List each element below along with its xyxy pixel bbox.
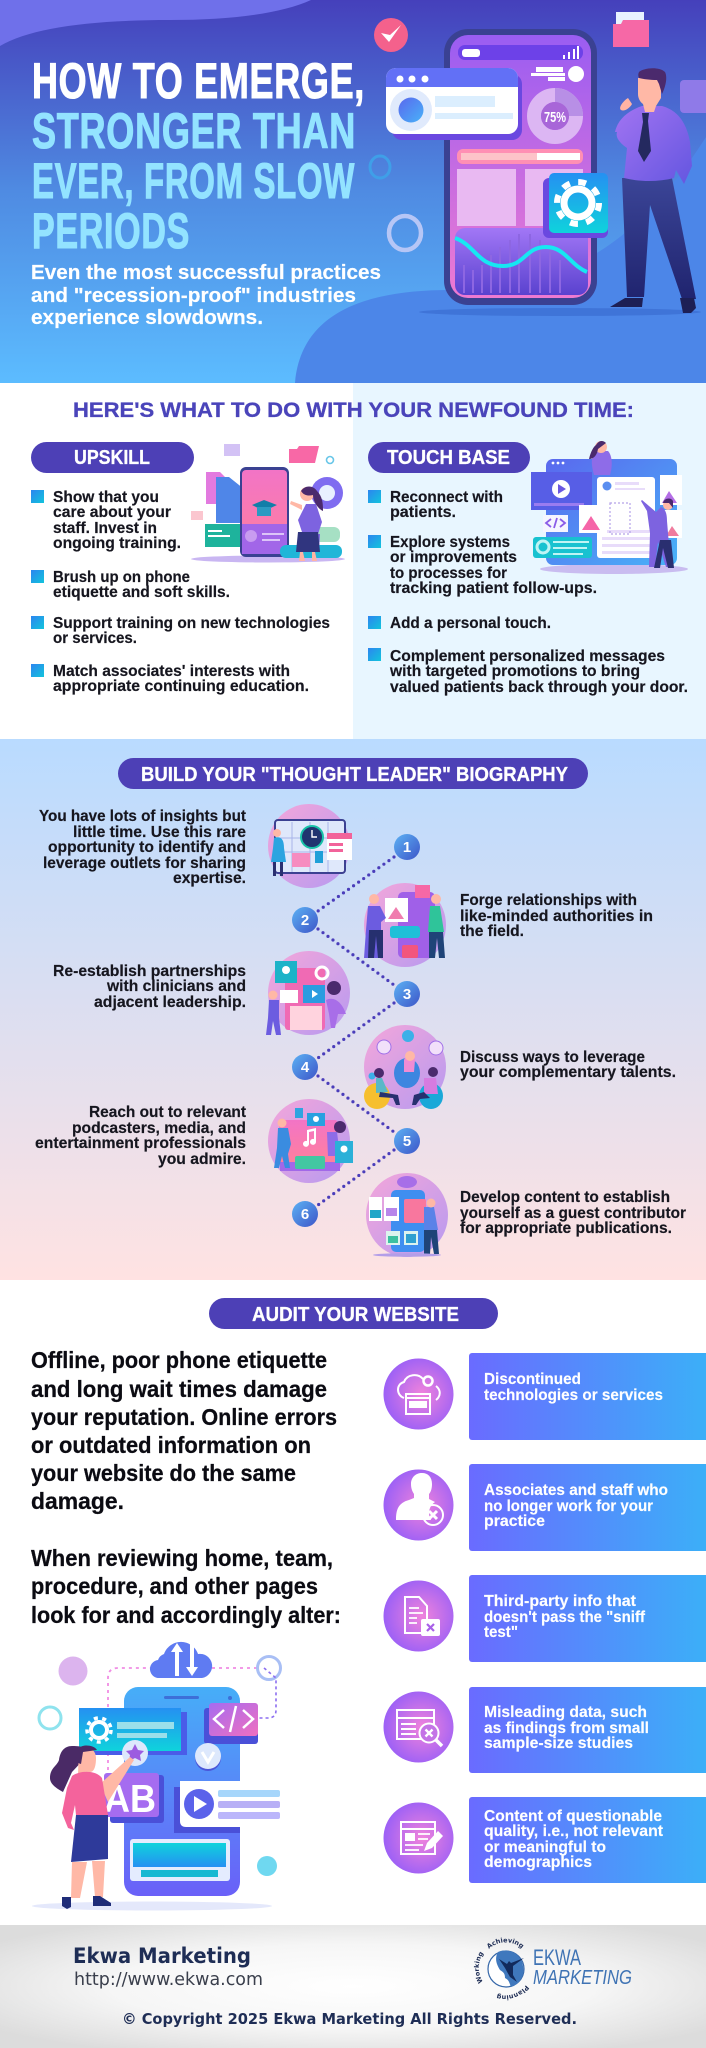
text: audit intro — [31, 1347, 341, 1628]
text: step 4: Discuss ways to leverage — [460, 1049, 645, 1066]
panel: footer — [0, 1925, 706, 2048]
icon: cloud window — [384, 1358, 454, 1430]
text: step 5: you admire. — [158, 1151, 246, 1168]
list: upskill bullets: Brush up on phone — [53, 569, 190, 586]
step 2 illustration: two colleagues — [364, 883, 446, 967]
text: audit intro: your website do the same — [31, 1460, 296, 1486]
icon: document with cross — [384, 1580, 454, 1652]
decoration: rings — [370, 80, 706, 250]
chart: donut 75% — [534, 88, 583, 137]
logo: Ekwa Marketing: Achieving — [487, 1938, 524, 1949]
logo: Ekwa Marketing: MARKETING — [533, 1967, 632, 1989]
text: step 4 — [460, 1049, 676, 1081]
panel: audit your website — [0, 1280, 706, 1925]
logo: Ekwa Marketing: Planning — [496, 1985, 530, 2000]
card: discontinued technologies — [469, 1353, 706, 1440]
step number badges: 4 — [301, 1059, 310, 1076]
illustration: touch base window and people — [531, 441, 688, 574]
illustration: phone — [444, 29, 597, 305]
step 4 illustration: seated group — [364, 1025, 446, 1109]
shape: top-left blob — [0, 0, 311, 46]
subtitle: Even the most successful practices — [31, 262, 381, 284]
pill: touch base — [368, 442, 530, 473]
panel: thought leader biography — [0, 739, 706, 1280]
text: step 1: You have lots of insights but — [39, 808, 246, 825]
list: touch base bullets — [368, 489, 688, 696]
chart: donut 75%: 75% — [544, 109, 566, 126]
list: upskill bullets: staff. Invest in — [53, 520, 157, 537]
card: questionable content — [469, 1797, 706, 1883]
connector: dotted zigzag — [318, 857, 394, 1205]
text: step 6: yourself as a guest contributor — [460, 1205, 686, 1222]
card: former staff: Associates and staff who — [484, 1482, 668, 1499]
footer: company name and url: http://www.ekwa.com — [74, 1969, 263, 1990]
pill: touch base: TOUCH BASE — [387, 447, 510, 469]
list: upskill bullets: Show that you — [53, 489, 159, 506]
pill: biography heading: BUILD YOUR "THOUGHT LEADER" BIOGRAPHY — [141, 764, 569, 786]
step number badges: 5 — [403, 1133, 411, 1150]
list: upskill bullets: Support training on new technologies — [53, 615, 330, 632]
text: audit intro: or outdated information on — [31, 1432, 311, 1458]
panel: newfound time section — [0, 383, 706, 739]
step number badges: 6 — [301, 1206, 309, 1223]
list: upskill bullets: or services. — [53, 630, 137, 647]
logo: Ekwa Marketing: EKWA — [533, 1945, 581, 1970]
card: third-party info: Third-party info that — [484, 1593, 636, 1610]
title: STRONGER THAN — [32, 103, 356, 159]
text: step 5: Reach out to relevant — [89, 1104, 246, 1121]
text: step 3: with clinicians and — [106, 978, 246, 995]
text: step 6 — [460, 1189, 686, 1237]
list: touch base bullets: valued patients back through your door. — [390, 679, 688, 696]
text: audit intro: look for and accordingly alter: — [31, 1602, 341, 1628]
list: touch base bullets: Reconnect with — [390, 489, 503, 506]
card: former staff: no longer work for your — [484, 1498, 653, 1515]
panel: hero header — [0, 0, 706, 383]
step 6 illustration: publishing content — [366, 1173, 448, 1257]
card: former staff — [469, 1464, 706, 1551]
text: step 2: Forge relationships with — [460, 892, 637, 909]
list: upskill bullets: Match associates' interests with — [53, 663, 290, 680]
footer: company name and url — [73, 1944, 263, 1990]
text: step 2 — [460, 892, 653, 940]
list: upskill bullets: appropriate continuing education. — [53, 678, 309, 695]
list: upskill bullets: care about your — [53, 504, 171, 521]
card: questionable content: or meaningful to — [484, 1839, 606, 1856]
illustration: phone with woman: AB — [104, 1778, 156, 1821]
illustration: phone with woman — [32, 1642, 280, 1910]
text: step 5: podcasters, media, and — [72, 1120, 246, 1137]
step 1 illustration: calendar and clock — [268, 804, 352, 888]
text: step 2: the field. — [460, 923, 524, 940]
title: PERIODS — [32, 203, 190, 259]
subtitle: and "recession-proof" industries — [31, 285, 356, 307]
text: audit intro: damage. — [31, 1488, 124, 1514]
icon: removed person — [384, 1470, 454, 1540]
card: misleading data: sample-size studies — [484, 1735, 633, 1752]
step number badges — [292, 834, 420, 1227]
list: touch base bullets: tracking patient follow-ups. — [390, 580, 597, 597]
list: touch base bullets: with targeted promotions to bring — [389, 663, 640, 680]
list: upskill bullets: ongoing training. — [53, 535, 181, 552]
heading: HERE'S WHAT TO DO WITH YOUR NEWFOUND TIME: — [73, 399, 634, 422]
text: audit intro: your reputation. Online errors — [31, 1404, 337, 1430]
list: touch base bullets: to processes for — [390, 565, 507, 582]
step number badges: 3 — [403, 986, 411, 1003]
pill: upskill: UPSKILL — [74, 447, 150, 469]
list: touch base bullets: or improvements — [390, 549, 517, 566]
text: step 5 — [35, 1104, 246, 1168]
illustration: upskill phone and woman — [191, 444, 345, 562]
card: misleading data: Misleading data, such — [484, 1704, 647, 1721]
icon: check badge — [374, 18, 408, 52]
text: step 1: opportunity to identify and — [48, 839, 246, 856]
subtitle: experience slowdowns. — [31, 307, 263, 329]
footer: copyright: © Copyright 2025 Ekwa Marketing All Rights Reserved. — [122, 2010, 577, 2028]
text: step 1: expertise. — [173, 870, 246, 887]
text: step 3 — [53, 963, 246, 1011]
icon: document with pencil — [384, 1802, 454, 1874]
text: step 1 — [39, 808, 246, 887]
text: step 5: entertainment professionals — [35, 1135, 246, 1152]
card: questionable content: Content of questionable — [484, 1808, 662, 1825]
card: discontinued technologies: technologies or services — [484, 1387, 663, 1404]
list: touch base bullets: Explore systems — [390, 534, 510, 551]
text: audit intro: Offline, poor phone etiquette — [31, 1347, 327, 1373]
step 5 illustration: music and media — [268, 1099, 353, 1183]
pill: upskill — [31, 442, 194, 473]
list: touch base bullets: patients. — [390, 504, 456, 521]
pill: audit heading: AUDIT YOUR WEBSITE — [252, 1304, 459, 1326]
card: questionable content: demographics — [484, 1854, 592, 1871]
icon: gear tile — [543, 173, 608, 238]
card: misleading data — [469, 1687, 706, 1773]
step number badges: 2 — [301, 912, 309, 929]
title: HOW TO EMERGE, — [32, 53, 365, 109]
icon: magnifier on window — [384, 1692, 454, 1762]
text: audit intro: When reviewing home, team, — [31, 1545, 333, 1571]
card: misleading data: as findings from small — [484, 1720, 649, 1737]
text: step 1: little time. Use this rare — [73, 824, 246, 841]
pill: biography heading — [118, 758, 588, 789]
logo: Ekwa Marketing: Working — [474, 1952, 484, 1984]
list: touch base bullets: Complement personalized messages — [390, 648, 665, 665]
card: third-party info: test" — [484, 1624, 518, 1641]
text: step 2: like-minded authorities in — [460, 908, 653, 925]
list: upskill bullets: etiquette and soft skills. — [53, 584, 230, 601]
card: third-party info: doesn't pass the "sniff — [484, 1609, 646, 1626]
icon: folder — [613, 12, 649, 47]
step number badges: 1 — [403, 839, 411, 856]
subtitle — [31, 262, 381, 329]
illustration: window card — [386, 68, 522, 140]
text: audit intro: procedure, and other pages — [31, 1573, 318, 1599]
card: discontinued technologies: Discontinued — [484, 1371, 581, 1388]
title — [32, 53, 365, 259]
text: step 4: your complementary talents. — [460, 1064, 676, 1081]
footer: company name and url: Ekwa Marketing — [73, 1944, 251, 1968]
title: EVER, FROM SLOW — [32, 153, 355, 209]
step 3 illustration: partners — [266, 951, 350, 1035]
text: step 1: leverage outlets for sharing — [43, 855, 246, 872]
logo: Ekwa Marketing — [474, 1938, 632, 2000]
list: touch base bullets: Add a personal touch. — [390, 615, 551, 632]
text: step 3: Re-establish partnerships — [53, 963, 246, 980]
pill: audit heading — [209, 1298, 498, 1329]
text: step 3: adjacent leadership. — [94, 994, 246, 1011]
shape: bottom-right blob — [295, 137, 706, 383]
list: upskill bullets — [31, 489, 330, 695]
text: step 6: for appropriate publications. — [460, 1220, 672, 1237]
card: questionable content: quality, i.e., not relevant — [484, 1823, 663, 1840]
card: former staff: practice — [484, 1513, 545, 1530]
text: audit intro: and long wait times damage — [31, 1376, 327, 1402]
text: step 6: Develop content to establish — [460, 1189, 670, 1206]
card: third-party info — [469, 1575, 706, 1662]
illustration: man thinking — [419, 68, 701, 316]
